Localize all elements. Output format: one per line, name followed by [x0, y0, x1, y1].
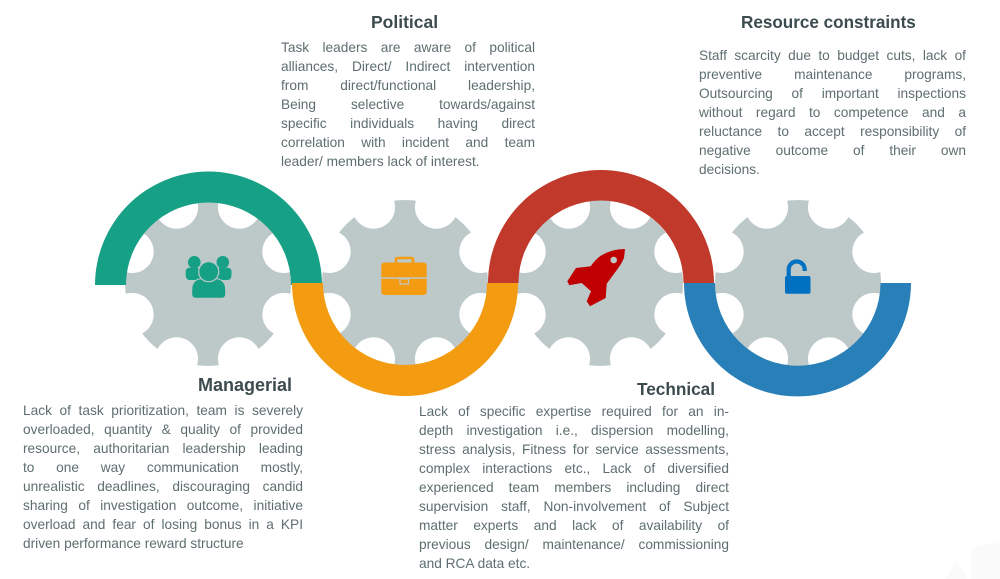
text: Technical: supervision staff, Non-involvement of Subject [419, 499, 729, 514]
text: Technical: matter experts and lack of availability of [419, 518, 729, 533]
text: Technical: complex interactions etc., Lack of diversified [419, 461, 729, 476]
text: Managerial: unrealistic deadlines, discouraging candid [23, 479, 303, 494]
icon: open padlock [785, 262, 810, 294]
gear: managerial [111, 186, 305, 380]
text: Technical: depth investigation i.e., dispersion modelling, [419, 423, 729, 438]
gear: political [308, 186, 502, 380]
heading: Technical: Technical [637, 379, 715, 399]
text: Managerial: Lack of task prioritization, team is severely [23, 403, 303, 418]
text: Managerial: resource, authoritarian leadership leading [23, 441, 303, 456]
text: Technical: previous design/ maintenance/ commissioning [419, 537, 729, 552]
text: Resource constraints: negative outcome of their own [699, 143, 966, 158]
gear: technical [503, 186, 697, 380]
gear: resource constraints [701, 186, 895, 380]
text: Political: alliances, Direct/ Indirect intervention [281, 59, 535, 74]
text: Technical: experienced team members including direct [419, 480, 729, 495]
arc: blue [684, 283, 911, 396]
text: Managerial: sharing of investigation outcome, initiative [23, 498, 303, 513]
text: Political: specific individuals having direct [281, 116, 535, 131]
arc: orange [292, 283, 518, 396]
text: Managerial [23, 403, 303, 551]
text: Managerial: driven performance reward structure [23, 536, 244, 551]
heading: Resource constraints: Resource constraints [741, 13, 916, 32]
icon: briefcase [381, 258, 427, 295]
heading: Managerial: Managerial [198, 375, 292, 395]
text: Political: Task leaders are aware of political [281, 40, 535, 55]
text: Resource constraints: Outsourcing of important inspections [699, 86, 966, 101]
heading: Political: Political [371, 12, 438, 32]
text: Resource constraints: Staff scarcity due to budget cuts, lack of [699, 48, 966, 63]
text: Technical [419, 404, 729, 571]
text: Technical: Lack of specific expertise required for an in- [419, 404, 729, 419]
text: Resource constraints: decisions. [699, 162, 760, 177]
text: Resource constraints: without regard to competence and a [699, 105, 966, 120]
text: Political: from direct/functional leadership, [281, 78, 535, 93]
text: Political: correlation with incident and team [281, 135, 535, 150]
arc: red [488, 170, 714, 283]
text: Technical: stress analysis, Fitness for service assessments, [419, 442, 729, 457]
text: Political: Being selective towards/against [281, 97, 535, 112]
icon: rocket [567, 249, 625, 306]
text: Political [281, 40, 535, 169]
text: Technical: and RCA data etc. [419, 556, 530, 571]
text: Resource constraints: reluctance to accept responsibility of [699, 124, 966, 139]
text: Managerial: to one way communication mostly, [23, 460, 303, 475]
text: Resource constraints [699, 48, 966, 177]
faint background shape [945, 543, 1000, 579]
text: Managerial: overload and fear of losing bonus in a KPI [23, 517, 303, 532]
arc: green [95, 172, 322, 285]
text: Managerial: overloaded, quantity & quality of provided [23, 422, 303, 437]
text: Political: leader/ members lack of interest. [281, 154, 480, 169]
text: Resource constraints: preventive maintenance programs, [699, 67, 966, 82]
icon: team [186, 256, 232, 298]
